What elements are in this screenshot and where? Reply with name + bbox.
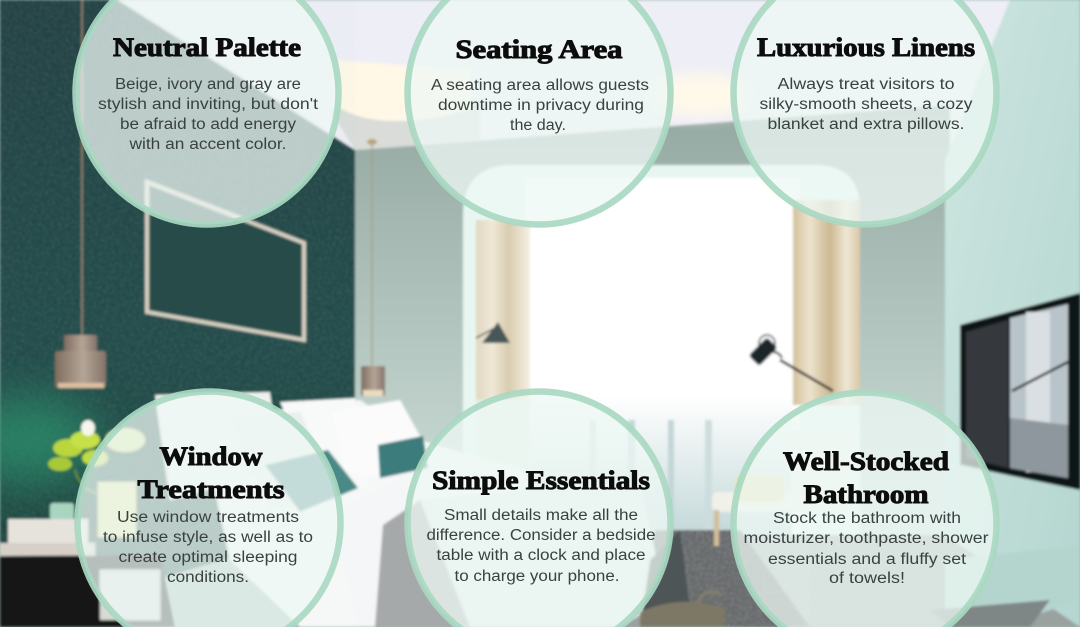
body text: table with a clock and place [436,547,646,564]
circle: Simple Essentials [408,392,670,627]
cup [50,503,74,520]
body text: of towels! [829,570,905,587]
body text [426,507,656,585]
circle: Well-Stocked Bathroom [734,392,996,627]
sheer curtains [530,395,792,535]
rug [640,530,810,627]
body text: difference. Consider a bedside [426,527,656,544]
body text: downtime in privacy during [438,97,644,114]
body text: create optimal sleeping [118,549,298,566]
ceiling [0,0,1080,160]
bed [200,400,690,627]
body text [744,510,988,587]
body text: A seating area allows guests [431,77,649,94]
body text [98,76,319,153]
teal cushions [265,436,428,512]
heading: Luxurious Linens [757,33,975,62]
ceiling glow right [650,73,750,117]
hair dryer [749,335,833,391]
framed mirror [147,182,304,340]
body text: be afraid to add energy [120,116,296,133]
body text: to infuse style, as well as to [103,529,313,546]
body text: the day. [510,117,566,134]
wall texture [0,0,355,627]
nightstand [0,555,175,627]
body text: with an accent color. [128,136,286,153]
heading: Window [160,442,263,471]
stacked books [0,519,95,557]
body text: Use window treatments [117,509,299,526]
heading: Neutral Palette [113,33,301,62]
heading: Bathroom [804,480,929,509]
body text [103,509,313,586]
left curtain [476,220,530,530]
books on shelf [100,570,160,620]
circle: Window Treatments [78,392,340,627]
far wall [355,105,950,560]
right curtain [793,200,860,405]
desk lamp [476,322,510,343]
window opening [463,165,860,560]
ceiling glow left [335,60,470,121]
heading: Treatments [138,475,284,504]
circle: Neutral Palette [76,0,338,224]
body text: essentials and a fluffy set [768,551,967,568]
body text: Beige, ivory and gray are [115,76,301,93]
right wall [945,0,1080,627]
body text: conditions. [167,569,249,586]
heading: Well-Stocked [783,447,950,476]
body text: silky-smooth sheets, a cozy [760,96,973,113]
circle: Luxurious Linens [734,0,996,224]
body text: blanket and extra pillows. [768,116,964,133]
armchair [712,430,852,546]
body text: stylish and inviting, but don't [98,96,319,113]
heading: Seating Area [456,35,622,64]
wall green glow [0,395,100,485]
body text: Small details make all the [444,507,638,524]
body text [760,76,973,133]
plant [48,420,145,537]
floor corner [930,600,1050,627]
left pendant lamp [55,0,106,388]
pillows [155,392,425,510]
wall art on right [960,293,1080,490]
heading: Simple Essentials [432,466,650,495]
soffit below ceiling glow [330,100,480,150]
left dark green wall [0,0,355,627]
body text: to charge your phone. [454,568,620,585]
right pendant lamp [361,139,385,396]
heading [138,442,284,504]
body text: Always treat visitors to [778,76,954,93]
body text [431,77,649,134]
body text: Stock the bathroom with [773,510,961,527]
circle: Seating Area [408,0,670,224]
body text: moisturizer, toothpaste, shower [744,530,988,547]
basket [640,592,725,627]
floor [465,535,1080,627]
heading [783,447,950,509]
